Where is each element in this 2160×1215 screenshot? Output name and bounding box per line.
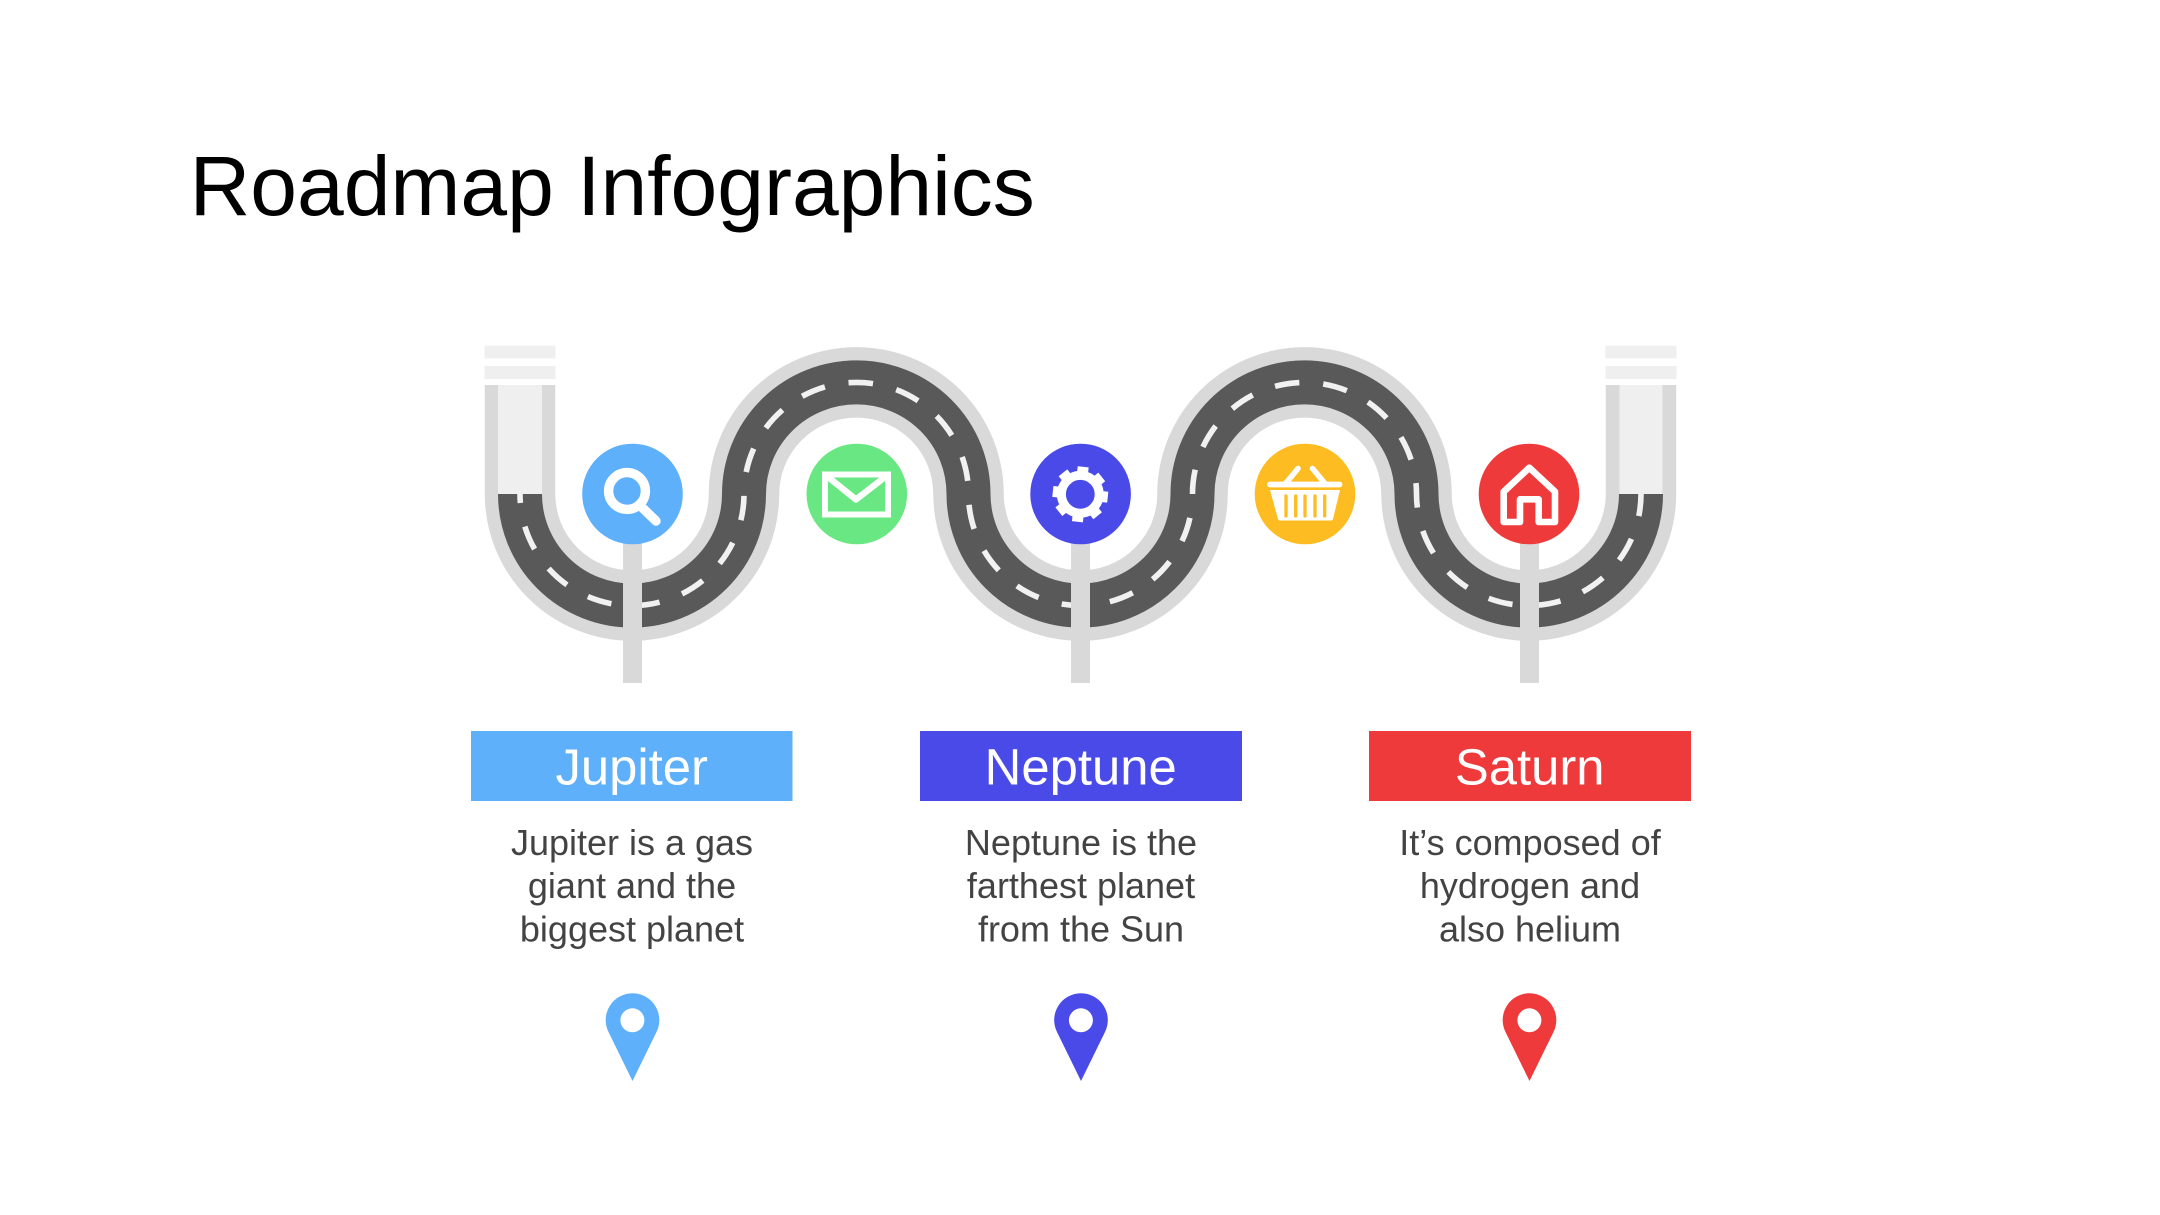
text: Neptune description	[965, 822, 1197, 950]
icon: gear on purple circle	[1030, 444, 1131, 544]
title: Roadmap Infographics	[190, 139, 1035, 233]
text: Neptune description: farthest planet	[967, 865, 1195, 906]
pole: Saturn	[1520, 540, 1539, 683]
panel: Jupiter	[471, 731, 792, 1081]
text: Jupiter description: giant and the	[528, 865, 736, 906]
banner: Saturn	[1369, 731, 1691, 801]
text: Saturn description: It’s composed of	[1399, 822, 1662, 863]
icon: purple map pin	[1054, 993, 1108, 1081]
text: Saturn description	[1399, 822, 1662, 950]
panel: Saturn	[1369, 731, 1691, 1081]
text: Jupiter description	[511, 822, 753, 950]
text: Jupiter description: Jupiter is a gas	[511, 822, 753, 863]
road shoulder	[520, 382, 1641, 606]
right road-end stripes	[1606, 346, 1676, 379]
text: Saturn description: also helium	[1439, 908, 1621, 950]
text: Neptune description: Neptune is the	[965, 822, 1197, 863]
lane dashes	[520, 382, 1641, 606]
text: Jupiter description: biggest planet	[520, 908, 744, 950]
text: Saturn description: hydrogen and	[1420, 865, 1640, 906]
panel: Neptune	[920, 731, 1242, 1081]
banner: Jupiter: Jupiter	[555, 738, 708, 796]
banner: Saturn: Saturn	[1455, 738, 1605, 796]
text: Neptune description: from the Sun	[978, 908, 1184, 950]
icon: envelope on green circle	[806, 444, 907, 544]
pole: Neptune	[1071, 540, 1090, 683]
icon: house on red circle	[1479, 444, 1579, 544]
icon: magnifier on blue circle	[582, 444, 683, 544]
icon: red map pin	[1503, 993, 1556, 1081]
pole: Jupiter	[623, 540, 642, 683]
asphalt	[520, 382, 1641, 606]
icon: blue map pin	[606, 993, 659, 1081]
banner: Neptune	[920, 731, 1242, 801]
winding road	[498, 382, 1662, 606]
banner: Neptune: Neptune	[985, 738, 1177, 796]
icon: basket on yellow circle	[1255, 444, 1355, 544]
right road end	[1620, 385, 1662, 494]
left road start	[498, 385, 542, 494]
left road-end stripes	[484, 346, 556, 379]
banner: Jupiter	[471, 731, 792, 801]
